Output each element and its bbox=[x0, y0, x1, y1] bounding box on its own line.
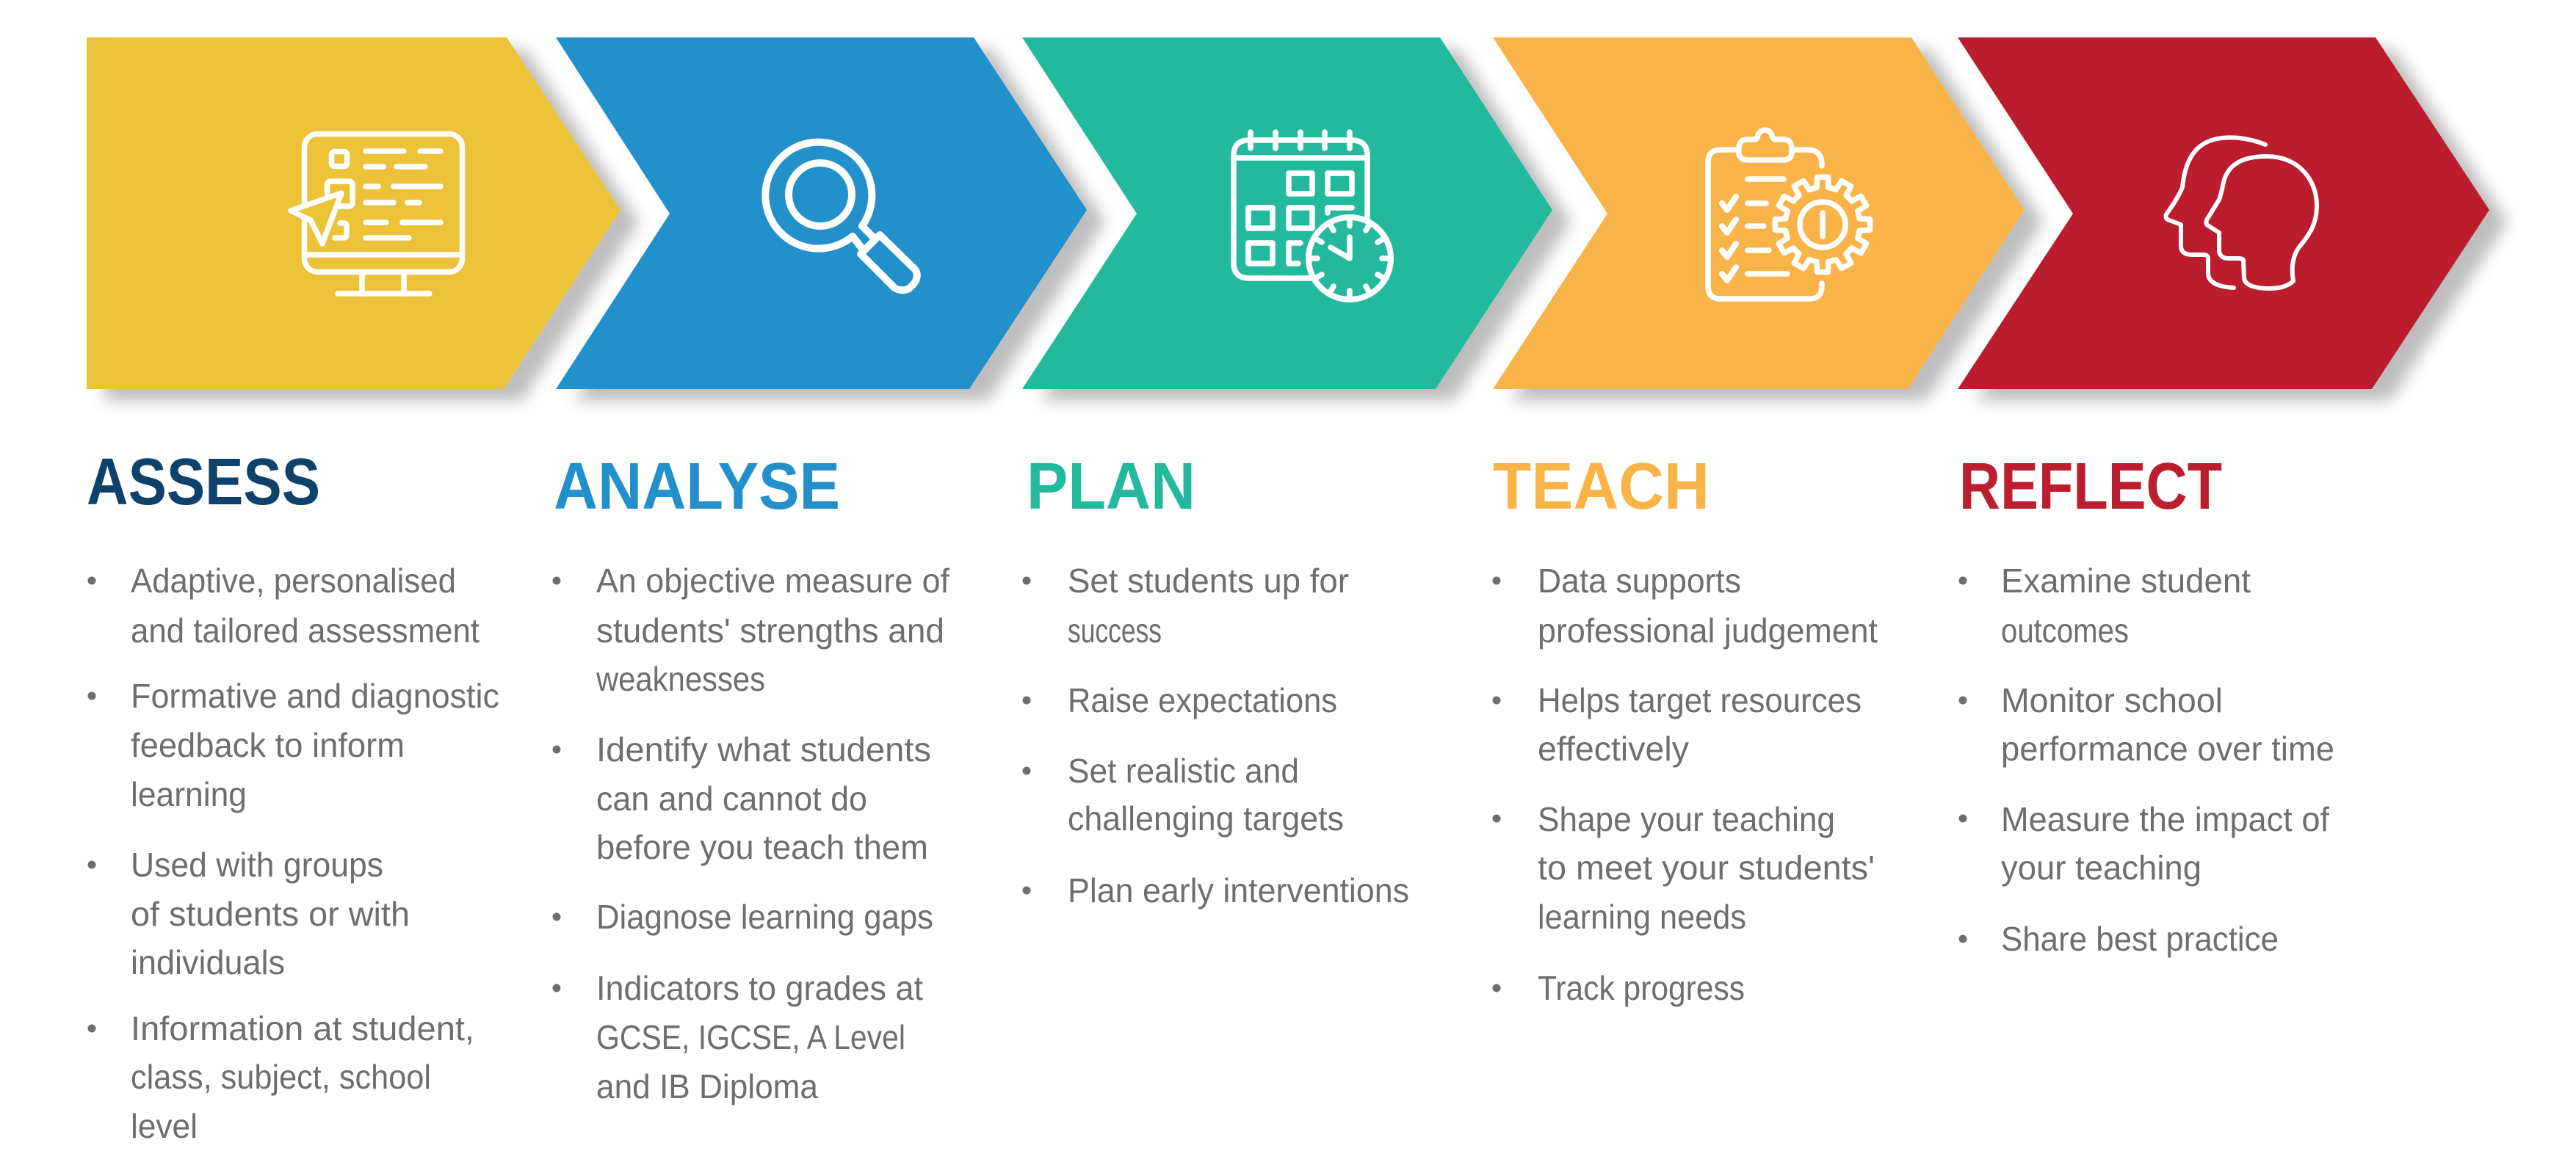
bullet: student outcomes: outcomes bbox=[2001, 611, 2129, 650]
panel: reflect chevron bbox=[1958, 37, 2489, 389]
panel: analyse chevron bbox=[556, 37, 1087, 389]
chevron shape: assess bbox=[87, 37, 621, 389]
bullet: targets: challenging targets bbox=[1068, 799, 1344, 838]
bullet: groups or individuals bbox=[88, 846, 410, 981]
bullet: indicators to grades bbox=[552, 969, 923, 1105]
bullet: identify what students can do bbox=[552, 730, 931, 866]
panel: teach chevron bbox=[1493, 37, 2025, 389]
bullet: raise expectations: Raise expectations bbox=[1068, 681, 1337, 719]
bullet: impact of teaching: your teaching bbox=[2001, 849, 2201, 887]
icon: magnifying glass bbox=[765, 142, 917, 290]
bullet: shape your teaching bbox=[1492, 800, 1875, 936]
bullet: objective measure bbox=[552, 562, 949, 698]
bullet: identify what students can do: before you teach them bbox=[596, 828, 928, 866]
bullet: early interventions: Plan early interventions bbox=[1068, 871, 1409, 909]
heading: analyse: ANALYSE bbox=[554, 450, 840, 523]
bullet: student outcomes: Examine student bbox=[2001, 562, 2251, 600]
icon: clipboard with checklist and gear bbox=[1708, 130, 1870, 299]
bullet: professional judgement: professional judgement bbox=[1538, 611, 1878, 650]
chevron shape: analyse bbox=[556, 37, 1087, 389]
bullet: groups or individuals: of students or with bbox=[131, 895, 410, 933]
bullet: groups or individuals: individuals bbox=[131, 943, 285, 981]
bullet: formative feedback: Formative and diagnostic bbox=[131, 677, 499, 715]
bullet: information levels: Information at student, bbox=[131, 1009, 474, 1047]
panel: assess chevron bbox=[87, 37, 621, 389]
bullet: information levels: class, subject, school bbox=[131, 1058, 431, 1096]
bullet: professional judgement bbox=[1492, 562, 1878, 650]
bullet: school performance: performance over time bbox=[2001, 730, 2334, 768]
chevron shape: reflect bbox=[1958, 37, 2489, 389]
icon: calendar with clock bbox=[1234, 132, 1391, 299]
bullet: information levels: level bbox=[131, 1107, 198, 1145]
bullet: professional judgement: Data supports bbox=[1538, 562, 1741, 600]
bullet: adaptive assessment: Adaptive, personalised bbox=[131, 562, 456, 600]
bullet: identify what students can do: Identify what students bbox=[596, 730, 931, 769]
bullet: objective measure: students' strengths and bbox=[596, 611, 944, 650]
bullet: groups or individuals: Used with groups bbox=[131, 846, 383, 884]
heading: teach: TEACH bbox=[1493, 450, 1710, 523]
bullet: impact of teaching bbox=[1959, 800, 2329, 887]
bullet: objective measure: weaknesses bbox=[596, 660, 765, 698]
bullet: track progress: Track progress bbox=[1538, 969, 1745, 1007]
bullet: indicators to grades: Indicators to grades at bbox=[596, 969, 923, 1007]
bullet: best practice: Share best practice bbox=[2001, 920, 2279, 958]
icon: computer monitor with checklist and cursor bbox=[291, 134, 463, 294]
panel: plan chevron bbox=[1022, 37, 1552, 389]
column: teach text bbox=[1492, 450, 1878, 1007]
bullet: school performance bbox=[1959, 681, 2334, 768]
bullet: set students up: success bbox=[1068, 611, 1162, 650]
bullet: information levels bbox=[88, 1009, 474, 1145]
bullet: shape your teaching: to meet your students' bbox=[1538, 849, 1875, 887]
chevron shape: teach bbox=[1493, 37, 2025, 389]
bullet: adaptive assessment bbox=[88, 562, 480, 650]
bullet: school performance: Monitor school bbox=[2001, 681, 2223, 719]
column: reflect text bbox=[1959, 450, 2334, 958]
bullet: targets: Set realistic and bbox=[1068, 752, 1299, 790]
column: assess text bbox=[87, 446, 499, 1145]
bullet: student outcomes bbox=[1959, 562, 2251, 650]
bullet: shape your teaching: learning needs bbox=[1538, 898, 1746, 936]
heading: assess: ASSESS bbox=[87, 446, 320, 519]
bullet: target resources: effectively bbox=[1538, 730, 1689, 768]
heading: reflect: REFLECT bbox=[1959, 450, 2222, 523]
bullet: learning gaps: Diagnose learning gaps bbox=[596, 898, 933, 936]
column: analyse text bbox=[552, 450, 949, 1105]
heading: plan: PLAN bbox=[1027, 450, 1195, 523]
bullet: indicators to grades: and IB Diploma bbox=[596, 1067, 818, 1105]
bullet: indicators to grades: GCSE, IGCSE, A Level bbox=[596, 1018, 905, 1056]
bullet: set students up: Set students up for bbox=[1068, 562, 1349, 600]
bullet: set students up bbox=[1022, 562, 1349, 650]
bullet: target resources: Helps target resources bbox=[1538, 681, 1862, 719]
icon: two heads in profile bbox=[2166, 137, 2317, 288]
bullet: formative feedback: learning bbox=[131, 775, 247, 813]
bullet: identify what students can do: can and cannot do bbox=[596, 780, 867, 818]
bullet: shape your teaching: Shape your teaching bbox=[1538, 800, 1835, 838]
bullet: formative feedback bbox=[88, 677, 499, 813]
bullet: targets bbox=[1022, 752, 1344, 838]
bullet: formative feedback: feedback to inform bbox=[131, 726, 405, 764]
bullet: adaptive assessment: and tailored assessment bbox=[131, 611, 480, 650]
bullet: target resources bbox=[1492, 681, 1862, 768]
column: plan text bbox=[1022, 450, 1409, 909]
bullet: impact of teaching: Measure the impact of bbox=[2001, 800, 2329, 838]
chevron shape: plan bbox=[1022, 37, 1552, 389]
bullet: objective measure: An objective measure of bbox=[596, 562, 949, 600]
